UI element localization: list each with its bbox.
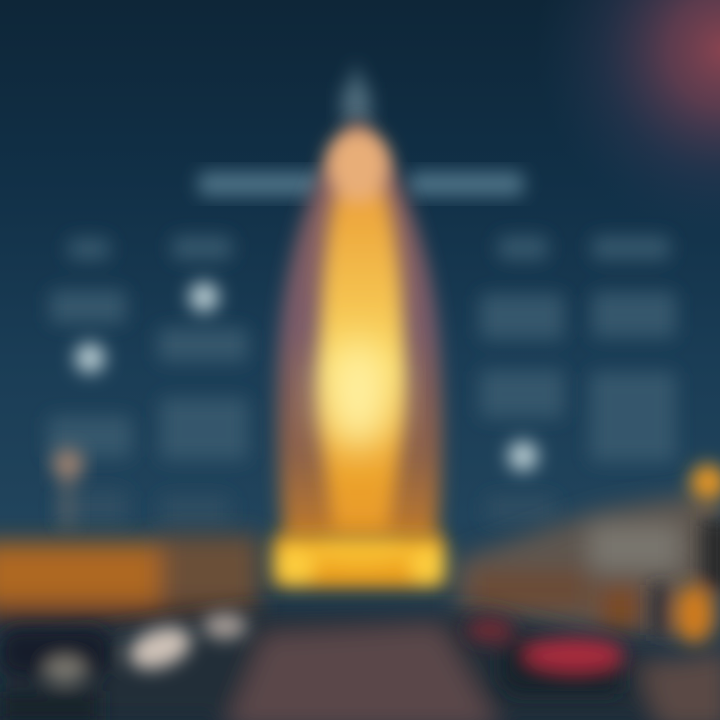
tower bright core — [324, 340, 392, 450]
panel: fourth column of text — [590, 236, 676, 462]
scene: orange lights on the right — [652, 464, 720, 642]
scene: cars on the left — [0, 613, 247, 720]
icons: glowing dots — [75, 282, 538, 471]
tower spire — [340, 62, 374, 122]
scene: cars on the right — [466, 617, 625, 694]
tower inner glow — [320, 129, 404, 530]
icon: lamp left — [52, 448, 84, 528]
scene: road — [0, 612, 720, 720]
scene: left street buildings — [0, 535, 260, 630]
panel: third column of text — [480, 236, 564, 522]
panel: far-left column of text — [48, 238, 132, 524]
heading: blurred title bars — [198, 172, 524, 196]
tower outer shell — [277, 120, 442, 540]
panel: second column of text — [158, 236, 248, 524]
scene: right street buildings — [455, 490, 720, 640]
tower base glow — [272, 534, 446, 588]
